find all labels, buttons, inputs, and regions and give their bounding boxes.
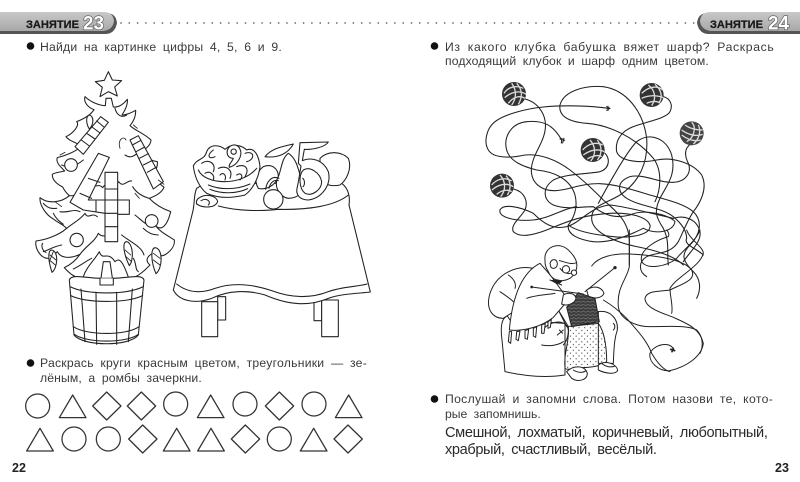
page number 23: 23 (775, 461, 789, 475)
task: memorise words: Послушай и запомни слова. Потом назови те, кото- (445, 392, 773, 406)
task: memorise words: рые запомнишь. (445, 407, 541, 421)
word list: храбрый, счастливый, весёлый. (445, 442, 657, 458)
garlands (75, 117, 108, 154)
header: lesson 23 tab (0, 12, 117, 34)
task: find digits: Найди на картинке цифры 4, 5, 6 и 9. (40, 40, 282, 54)
task: colour shapes: лёным, а ромбы зачеркни. (40, 371, 202, 385)
task: memorise words (431, 392, 773, 421)
shapes row one (26, 392, 362, 420)
basket with pretzels (193, 145, 260, 207)
tree tier scallops (42, 108, 158, 277)
header: lesson 24 tab: ЗАНЯТИЕ (710, 19, 763, 31)
wooden barrel (69, 277, 144, 344)
illustration: table with basket and fruit (173, 142, 370, 337)
knitting needles (530, 266, 617, 294)
table legs (202, 297, 338, 337)
header: lesson 24 tab (697, 12, 800, 34)
tree star (95, 72, 122, 97)
shoes (567, 363, 618, 380)
digit five (297, 142, 329, 200)
knitted scarf (567, 293, 599, 327)
illustration: granny knitting in armchair (489, 230, 703, 380)
tangled threads (486, 86, 704, 298)
task: colour shapes (27, 356, 367, 385)
armchair (489, 268, 617, 376)
yarn balls (490, 82, 704, 198)
word list (445, 425, 768, 458)
header: lesson 23 tab: ЗАНЯТИЕ (26, 19, 79, 31)
fruit: apple (320, 153, 350, 186)
granny head (545, 246, 577, 285)
lower threads (592, 230, 703, 372)
hands (562, 287, 604, 305)
fruit: pear with leaf (256, 144, 303, 198)
trunk (100, 262, 113, 285)
illustration: yarn threads maze (486, 82, 704, 298)
digit four (70, 153, 129, 242)
thread tips (560, 106, 610, 143)
dress with dots (558, 310, 607, 369)
ornaments (49, 115, 164, 274)
word list: Смешной, лохматый, коричневый, любопытный, (445, 425, 768, 441)
task: colour shapes: Раскрась круги красным цветом, треугольники — зе- (40, 356, 367, 370)
task: yarn maze (431, 40, 774, 68)
shapes row two (27, 425, 362, 453)
header: lesson 24 tab: 24 (768, 12, 789, 34)
tree foliage (36, 97, 174, 281)
shawl (508, 263, 568, 343)
page number 22: 22 (12, 461, 26, 475)
digit six cherry (264, 177, 283, 209)
header: lesson 23 tab: 23 (83, 12, 104, 34)
tablecloth (173, 183, 370, 304)
shapes grid (26, 392, 362, 453)
task: yarn maze: подходящий клубок и шарф одним цветом. (445, 54, 709, 68)
illustration: christmas tree with hidden digit 4 (36, 72, 174, 344)
task: yarn maze: Из какого клубка бабушка вяжет шарф? Раскрась (445, 40, 774, 54)
